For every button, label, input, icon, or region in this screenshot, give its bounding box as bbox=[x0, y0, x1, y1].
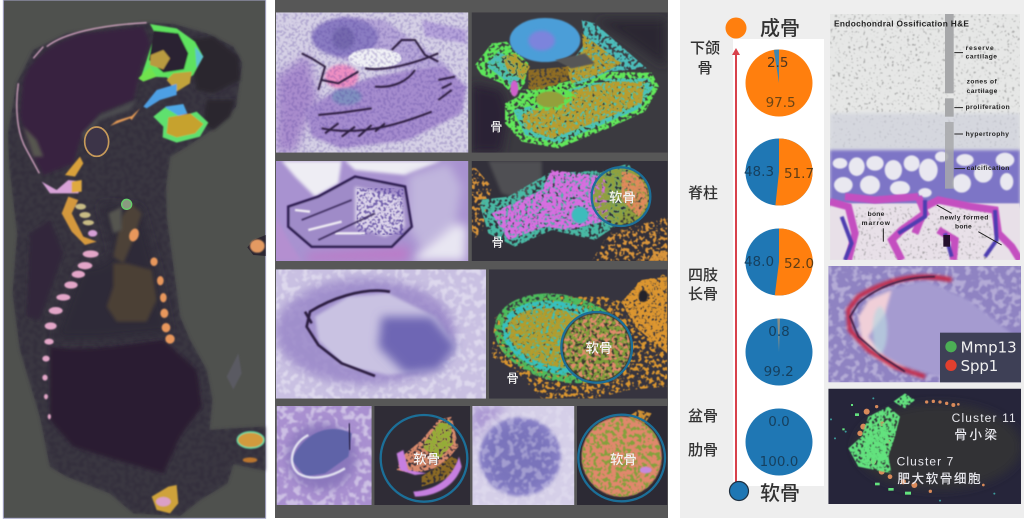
trachea bbox=[113, 203, 142, 263]
panel: right column background bbox=[680, 0, 1024, 518]
annotation labels: marrow bbox=[862, 220, 891, 227]
pie: rib bbox=[746, 408, 812, 476]
label: long bones of limbs bbox=[688, 267, 718, 303]
skull vault line bbox=[17, 23, 147, 173]
annotation: cluster 7 bbox=[897, 454, 981, 486]
annotation labels: newly formed bbox=[940, 214, 988, 221]
embryo body silhouette bbox=[8, 23, 265, 516]
white pie backing bbox=[733, 39, 824, 486]
pie: mandible: 97.5 bbox=[766, 95, 796, 111]
green cluster 7 spots bbox=[842, 393, 915, 495]
liver and abdomen bbox=[50, 340, 202, 473]
snout bbox=[187, 37, 240, 130]
legend: gene markers: Mmp13 bbox=[961, 338, 1017, 356]
bone and marrow bbox=[830, 197, 1020, 260]
label: spine: 脊柱 bbox=[688, 185, 718, 202]
ring: cartilage region bbox=[578, 415, 665, 501]
legend: gene markers: Spp1 bbox=[961, 357, 998, 375]
label: bone: 骨 bbox=[507, 372, 519, 386]
tile: spine H&E bbox=[276, 161, 468, 261]
panel: Mmp13 and Spp1 staining bbox=[828, 266, 1021, 382]
occipital and neck vertebrae bbox=[42, 157, 97, 245]
back tissue bbox=[27, 220, 63, 320]
legend: gene markers bbox=[940, 333, 1021, 382]
lung cavity bbox=[108, 207, 122, 233]
pie: pelvis bbox=[746, 318, 812, 386]
panel: cluster 7 and 11 map bbox=[828, 389, 1022, 504]
tile: jaw H&E bbox=[276, 12, 468, 153]
label: long bones of limbs: 长骨 bbox=[688, 286, 718, 303]
annotation labels: hypertrophy bbox=[966, 131, 1009, 138]
sternum segments bbox=[127, 227, 175, 344]
label: mandible bbox=[690, 39, 720, 77]
label: mandible: 下颌 bbox=[690, 39, 720, 57]
otic capsule ring bbox=[85, 127, 109, 156]
airway ring bbox=[122, 199, 132, 209]
annotation labels: cartilage bbox=[967, 88, 998, 95]
pie: rib: 100.0 bbox=[760, 454, 798, 470]
pie: long bones bbox=[744, 228, 814, 296]
teal sparse spots bbox=[830, 397, 995, 502]
annotation leader lines bbox=[883, 53, 1002, 245]
annotation: cluster 7: 肥大软骨细胞 bbox=[897, 471, 981, 486]
panel: pie column bbox=[733, 39, 824, 486]
annotation labels: calcification bbox=[967, 165, 1009, 172]
gray zone strip bbox=[945, 14, 954, 189]
annotation labels: cartilage bbox=[966, 54, 997, 61]
panel: whole-embryo section with bone clusters bbox=[3, 0, 266, 518]
cranial base bone bbox=[110, 108, 140, 126]
tile group: lower rows bbox=[275, 269, 667, 505]
annotation labels: reserve bbox=[966, 45, 994, 52]
tile group: upper rows bbox=[276, 12, 668, 261]
heart bbox=[107, 263, 157, 322]
label: bone: 骨 bbox=[492, 236, 504, 250]
annotation labels: bone bbox=[955, 224, 972, 231]
pie: spine: 51.7 bbox=[784, 166, 814, 182]
annotation: cluster 11 bbox=[952, 411, 1016, 442]
ring: cartilage region bbox=[592, 167, 650, 226]
pie: mandible: 2.5 bbox=[767, 55, 788, 71]
thoracic tissue bbox=[53, 203, 170, 340]
label: cartilage: 软骨 bbox=[610, 452, 637, 467]
pie: pelvis: 99.2 bbox=[764, 364, 794, 380]
tile: rib H&E bbox=[472, 406, 574, 505]
annotation labels: bone bbox=[868, 211, 885, 218]
pie: spine bbox=[744, 138, 814, 206]
tile: limb H&E bbox=[276, 269, 486, 399]
label: cartilage: 软骨 bbox=[609, 190, 636, 205]
spine vertebrae bbox=[42, 250, 99, 419]
tile: pelvis cluster map bbox=[374, 406, 470, 505]
arrow: cartilage to bone axis bbox=[732, 48, 740, 483]
legend: bone marker bbox=[726, 17, 800, 40]
label: cartilage: 软骨 bbox=[586, 341, 612, 356]
hindlimb bone bbox=[237, 432, 264, 463]
label: long bones of limbs: 四肢 bbox=[688, 267, 718, 284]
tile: pelvis H&E bbox=[276, 406, 372, 505]
ventral brain band bbox=[82, 100, 137, 140]
annotation labels bbox=[834, 18, 1010, 231]
label: pelvis: 盆骨 bbox=[688, 408, 718, 425]
tile: rib cluster map bbox=[577, 406, 668, 505]
limb bud right edge bbox=[247, 235, 266, 256]
tile: limb cluster map bbox=[489, 270, 668, 399]
pelvis bone bbox=[152, 485, 178, 513]
legend: cartilage marker bbox=[730, 482, 800, 505]
tile: jaw cluster map bbox=[472, 12, 668, 153]
annotation labels: zones of bbox=[967, 78, 997, 85]
calcified cartilage network bbox=[830, 150, 1020, 207]
body tissue texture bbox=[3, 20, 266, 517]
label: mandible: 骨 bbox=[697, 60, 713, 77]
pie: pelvis: 0.8 bbox=[768, 324, 790, 340]
ring: cartilage region bbox=[381, 415, 467, 502]
annotation labels: Endochondral Ossification H&E bbox=[834, 18, 969, 28]
pie: spine: 48.3 bbox=[744, 164, 774, 180]
brain bbox=[20, 27, 150, 175]
pie: mandible bbox=[746, 50, 812, 116]
panel: endochondral ossification H&E bbox=[830, 14, 1020, 260]
tile: spine cluster map bbox=[472, 161, 668, 261]
small fragment bbox=[227, 353, 242, 389]
annotation: cluster 11: 骨小梁 bbox=[954, 428, 997, 442]
legend: cartilage marker: 软骨 bbox=[760, 482, 800, 505]
annotation labels: proliferation bbox=[966, 104, 1010, 111]
forelimb bone bbox=[250, 239, 265, 253]
ring: cartilage region bbox=[561, 312, 632, 383]
orange cluster 11 spots bbox=[857, 400, 985, 493]
annotation: cluster 7: Cluster 7 bbox=[897, 454, 954, 468]
orbit and upper jaw bone bbox=[138, 24, 208, 143]
pie: long bones: 52.0 bbox=[784, 256, 814, 272]
label: bone: 骨 bbox=[490, 120, 502, 134]
pie: long bones: 48.0 bbox=[744, 254, 774, 270]
label: rib: 肋骨 bbox=[688, 442, 718, 459]
brain ventricle bbox=[23, 127, 43, 157]
label: cartilage: 软骨 bbox=[413, 451, 440, 466]
pie: rib: 0.0 bbox=[768, 414, 790, 430]
annotation: cluster 11: Cluster 11 bbox=[952, 411, 1016, 425]
panel: H&E and cluster tissue grid bbox=[275, 0, 668, 518]
legend: bone marker: 成骨 bbox=[760, 17, 800, 40]
